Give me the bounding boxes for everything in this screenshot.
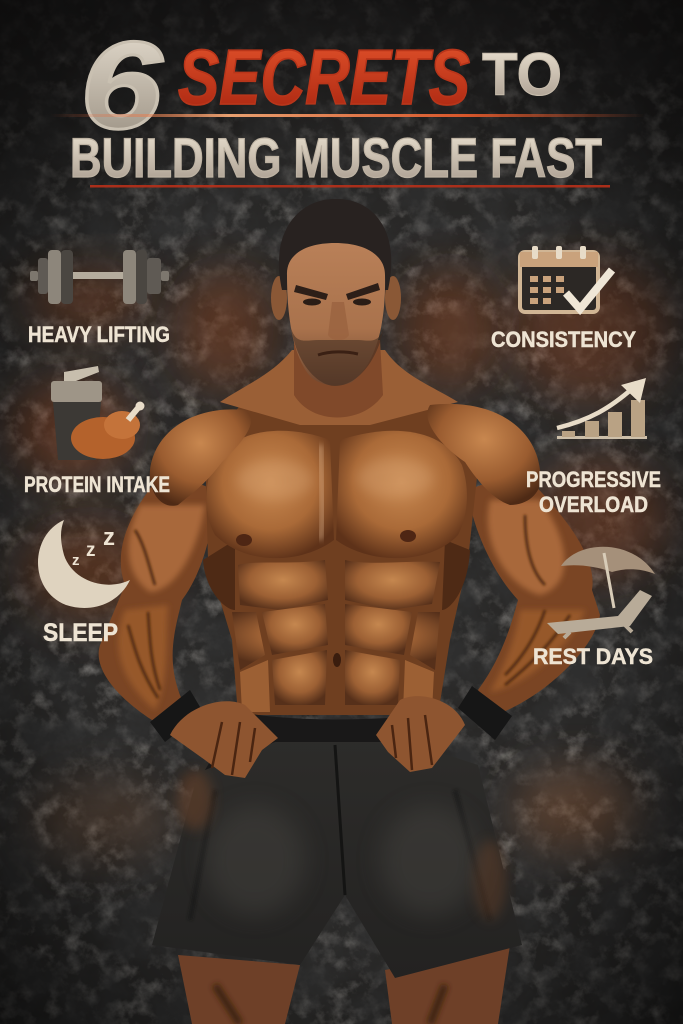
item: heavy lifting xyxy=(28,250,170,347)
icon: crescent moon with zzz xyxy=(38,520,130,608)
label: progressive overload: OVERLOAD xyxy=(539,492,648,517)
left hand xyxy=(170,701,278,778)
label: consistency: CONSISTENCY xyxy=(491,327,636,352)
nipples xyxy=(236,534,252,546)
left wristband xyxy=(150,690,203,742)
abdominal muscles xyxy=(232,560,440,712)
title word TO: TO xyxy=(482,41,562,108)
mouth xyxy=(318,352,358,355)
label: progressive overload xyxy=(526,467,661,517)
item: sleep xyxy=(38,520,130,647)
right arm xyxy=(468,470,600,715)
label: heavy lifting: HEAVY LIFTING xyxy=(28,322,170,347)
icon: crescent moon with zzz: z xyxy=(86,540,96,561)
item: rest days xyxy=(533,547,655,669)
label: protein intake: PROTEIN INTAKE xyxy=(24,472,170,497)
trapezius xyxy=(220,350,458,425)
nose xyxy=(328,302,349,340)
left arm xyxy=(99,470,215,722)
icon: crescent moon with zzz: z xyxy=(103,524,115,551)
head xyxy=(271,199,401,386)
right wristband xyxy=(458,686,512,740)
icon: beach umbrella and lounger xyxy=(547,547,655,638)
label: sleep: SLEEP xyxy=(43,619,118,647)
icon: rising bars with arrow xyxy=(557,378,647,439)
icon: shaker and chicken xyxy=(51,366,144,460)
icon: calendar with check xyxy=(520,246,612,312)
title bottom rule xyxy=(90,185,610,188)
ears xyxy=(271,276,287,320)
left deltoid xyxy=(150,409,251,506)
muscular man figure xyxy=(99,199,600,1024)
item: protein intake xyxy=(24,366,170,497)
title top rule xyxy=(50,114,645,117)
hair xyxy=(279,199,391,290)
stubble xyxy=(291,328,384,386)
left pectoral xyxy=(206,431,334,558)
icon: dumbbell xyxy=(30,250,169,304)
right hand xyxy=(376,696,465,772)
legs xyxy=(178,945,510,1024)
eyes xyxy=(303,298,321,306)
shorts xyxy=(152,735,522,978)
title xyxy=(50,17,645,189)
eyebrows xyxy=(294,283,380,300)
title word SECRETS: SECRETS xyxy=(178,33,470,121)
right deltoid xyxy=(427,404,541,505)
title number 6: 6 xyxy=(80,17,163,155)
face xyxy=(287,243,385,385)
torso xyxy=(150,350,541,715)
right pectoral xyxy=(336,431,467,558)
item: progressive overload xyxy=(526,378,661,517)
neck xyxy=(294,340,383,418)
item: consistency xyxy=(491,246,636,352)
waistband xyxy=(205,712,446,770)
icon: crescent moon with zzz: z xyxy=(72,552,80,569)
label: progressive overload: PROGRESSIVE xyxy=(526,467,661,492)
label: rest days: REST DAYS xyxy=(533,644,653,669)
